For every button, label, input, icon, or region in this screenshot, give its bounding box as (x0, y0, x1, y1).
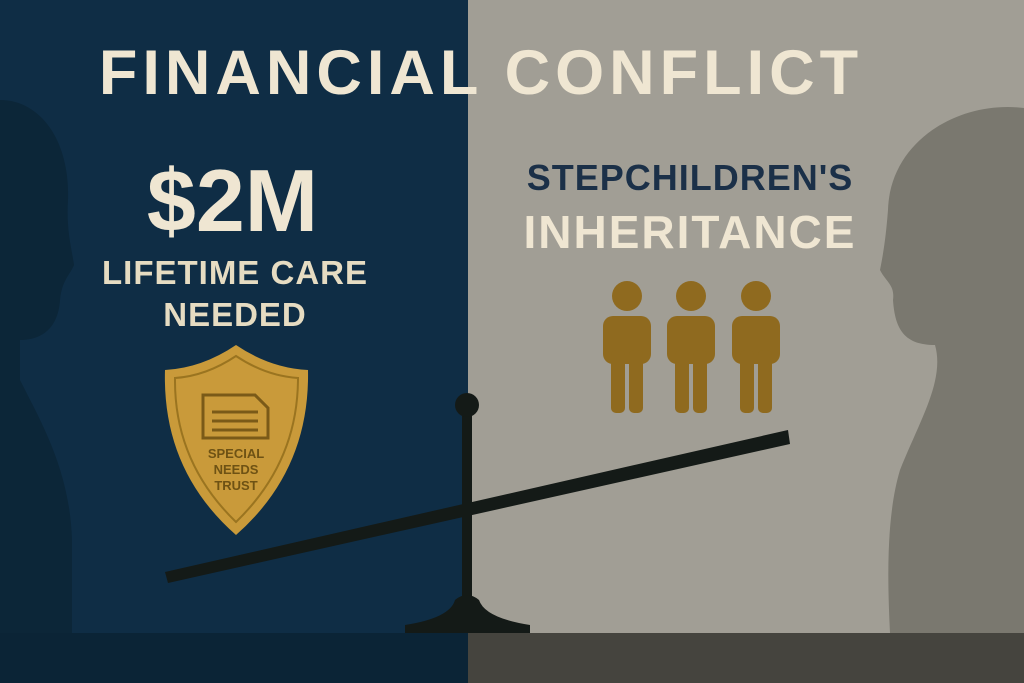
panel: right background (468, 0, 1024, 683)
text: lifetime care needed: NEEDED (163, 296, 307, 333)
text: lifetime care needed: LIFETIME CARE (102, 254, 368, 291)
icon: right silhouette (880, 107, 1024, 633)
icon: three people (603, 281, 780, 413)
text: $2M: $2M (147, 151, 318, 250)
title: FINANCIAL CONFLICT (99, 38, 863, 108)
text: stepchildren's: STEPCHILDREN'S (527, 157, 853, 198)
icon: left silhouette (0, 100, 74, 633)
panel: left background (0, 0, 468, 683)
text: lifetime care needed (102, 254, 368, 333)
icon: shield: TRUST (214, 478, 258, 493)
bottom strip (0, 633, 1024, 683)
text: inheritance: INHERITANCE (524, 206, 856, 258)
icon: seesaw scale (165, 393, 790, 633)
icon: shield: SPECIAL (208, 446, 264, 461)
icon: shield (165, 345, 308, 535)
icon: shield: NEEDS (214, 462, 259, 477)
